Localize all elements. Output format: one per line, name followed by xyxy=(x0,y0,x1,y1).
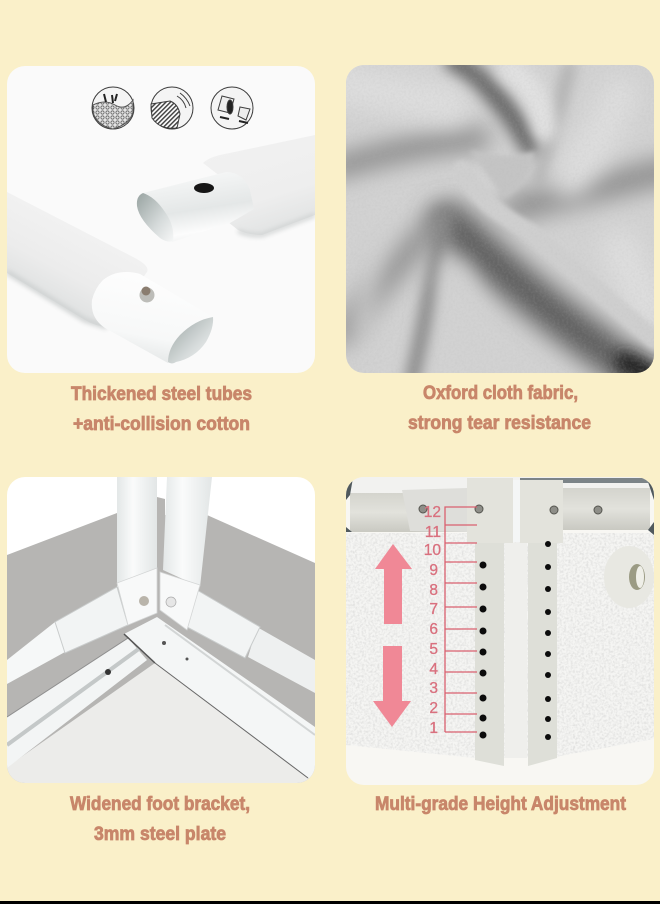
scale numbers 1 to 12: 1 xyxy=(429,720,438,737)
caption: oxford cloth: strong tear resistance xyxy=(408,412,591,434)
grey walls xyxy=(7,497,315,783)
floor xyxy=(7,663,315,783)
caption: oxford cloth xyxy=(408,382,591,434)
scale numbers 1 to 12: 5 xyxy=(429,641,438,658)
scale numbers 1 to 12 xyxy=(424,506,440,734)
top beams xyxy=(346,478,654,542)
perforated posts xyxy=(402,478,563,766)
lower tube end xyxy=(92,272,213,364)
scale numbers 1 to 12: 3 xyxy=(429,680,438,697)
caption: foot bracket xyxy=(70,793,250,845)
upper right foam sleeve xyxy=(203,135,315,235)
scale numbers 1 to 12: 8 xyxy=(429,582,438,599)
screws xyxy=(419,505,602,514)
scale numbers 1 to 12: 9 xyxy=(429,562,438,579)
caption: steel tubes: Thickened steel tubes xyxy=(71,383,252,405)
upper tube end xyxy=(136,178,252,242)
scale numbers 1 to 12: 4 xyxy=(429,661,438,678)
scale lines xyxy=(445,507,477,732)
icon: tube connection xyxy=(211,87,253,129)
fabric folds xyxy=(335,62,660,382)
fabric panel xyxy=(346,533,654,758)
scale numbers 1 to 12: 7 xyxy=(429,601,438,618)
scale numbers 1 to 12: 2 xyxy=(429,700,438,717)
caption: foot bracket: 3mm steel plate xyxy=(94,823,226,845)
panel: oxford cloth photo xyxy=(335,62,660,382)
post holes xyxy=(480,541,551,740)
caption: foot bracket: Widened foot bracket, xyxy=(70,793,250,815)
base rails xyxy=(7,617,315,778)
fabric highlight folds xyxy=(345,70,655,360)
panel: height adjustment xyxy=(346,477,654,785)
lower left foam sleeve xyxy=(7,192,148,327)
panel: foot bracket xyxy=(7,477,315,783)
top background xyxy=(354,477,641,480)
caption: steel tubes xyxy=(71,383,252,435)
center foam xyxy=(505,543,527,758)
scale numbers 1 to 12: 6 xyxy=(429,621,438,638)
side tubes xyxy=(7,587,315,693)
fabric grain xyxy=(460,230,650,373)
upright posts xyxy=(117,477,212,630)
icon: thick wall xyxy=(151,87,193,129)
caption: steel tubes: +anti-collision cotton xyxy=(73,413,250,435)
scale numbers 1 to 12: 11 xyxy=(425,524,441,541)
panel: steel tubes xyxy=(7,66,315,373)
scale numbers 1 to 12: 12 xyxy=(424,504,441,521)
scale numbers 1 to 12: 10 xyxy=(424,542,441,559)
icon: foam cushioning xyxy=(92,87,134,129)
caption: oxford cloth: Oxford cloth fabric, xyxy=(423,382,578,404)
arrow: up xyxy=(375,544,412,624)
caption: height adjustment: Multi-grade Height Adjustment xyxy=(375,793,626,815)
tube ring xyxy=(604,546,654,608)
arrow: down xyxy=(373,646,411,727)
